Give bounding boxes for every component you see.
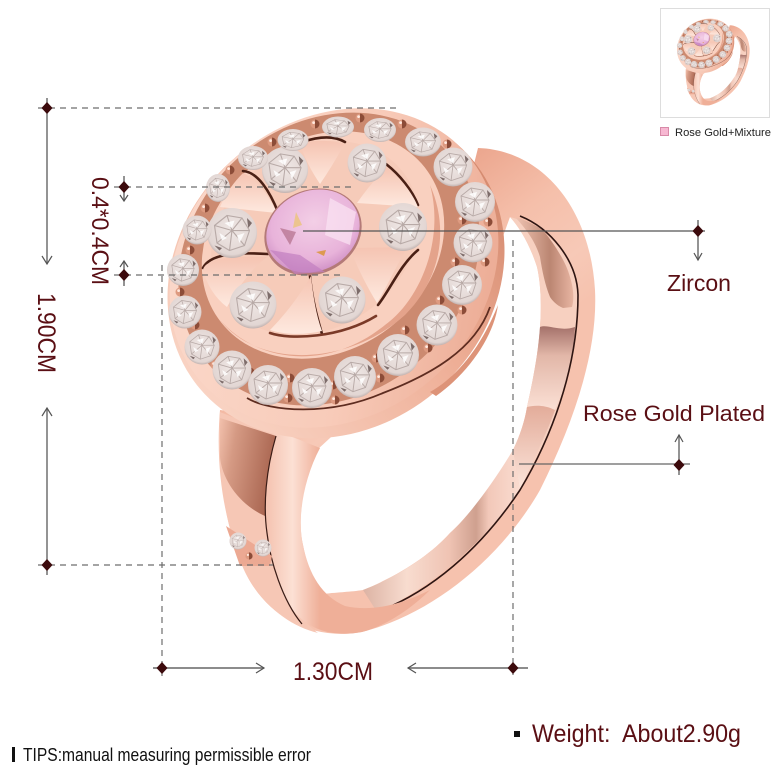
rim shadow arc xyxy=(247,307,490,409)
shank shadow crescent xyxy=(220,418,276,516)
centre pink zircon xyxy=(250,173,376,291)
head side wall xyxy=(101,42,571,506)
band rear pocket xyxy=(515,217,573,308)
label: 0.4*0.4CM: 0.4*0.4CM xyxy=(86,177,113,285)
band inner surface xyxy=(510,217,578,490)
inner crescent ring xyxy=(157,85,489,405)
label: Rose Gold Plated: Rose Gold Plated xyxy=(583,401,765,426)
inner stones xyxy=(207,144,427,328)
zircon callout line xyxy=(303,220,705,260)
top dashed guide xyxy=(38,107,398,109)
tips marker bar xyxy=(12,747,15,762)
width dimension: 1.30CM xyxy=(153,240,528,676)
left shank xyxy=(219,412,318,633)
rose gold callout line xyxy=(519,435,690,475)
stone dimension: 0.4*0.4CM xyxy=(114,176,352,286)
label: 1.30CM: 1.30CM xyxy=(293,658,373,686)
six petal panels xyxy=(203,141,418,334)
band inner lower surface xyxy=(363,450,520,612)
label: Zircon: Zircon xyxy=(667,270,731,296)
tips text: TIPS:manual measuring permissible error xyxy=(23,745,311,765)
band dark edge line xyxy=(377,216,578,612)
opening dark accents xyxy=(203,138,418,337)
small side stones xyxy=(226,526,272,566)
weight bullet xyxy=(514,731,520,737)
band inner shadow, rear xyxy=(527,326,575,410)
head rim xyxy=(105,42,563,494)
weight text: Weight: About2.90g xyxy=(532,720,741,748)
ring illustration xyxy=(101,42,595,634)
outer stones xyxy=(167,116,495,408)
label: 1.90CM: 1.90CM xyxy=(32,293,60,373)
left shank front face xyxy=(266,430,430,634)
thumbnail ring xyxy=(666,8,750,105)
centre opening xyxy=(173,101,457,375)
rim side notch xyxy=(430,305,498,396)
ring band xyxy=(219,148,595,634)
stone recess xyxy=(119,52,539,466)
height dimension: 1.90CM xyxy=(38,98,273,575)
band opening xyxy=(301,217,541,594)
colour label: Rose Gold+Mixture xyxy=(675,127,771,139)
band inner fade xyxy=(513,406,555,490)
crescent shadow xyxy=(220,185,440,356)
colour swatch xyxy=(660,128,668,136)
thumbnail panel xyxy=(660,8,770,118)
stone prongs xyxy=(176,114,492,404)
shank divider line xyxy=(265,436,302,624)
ring head xyxy=(101,42,571,506)
thumbnail frame xyxy=(660,8,770,118)
